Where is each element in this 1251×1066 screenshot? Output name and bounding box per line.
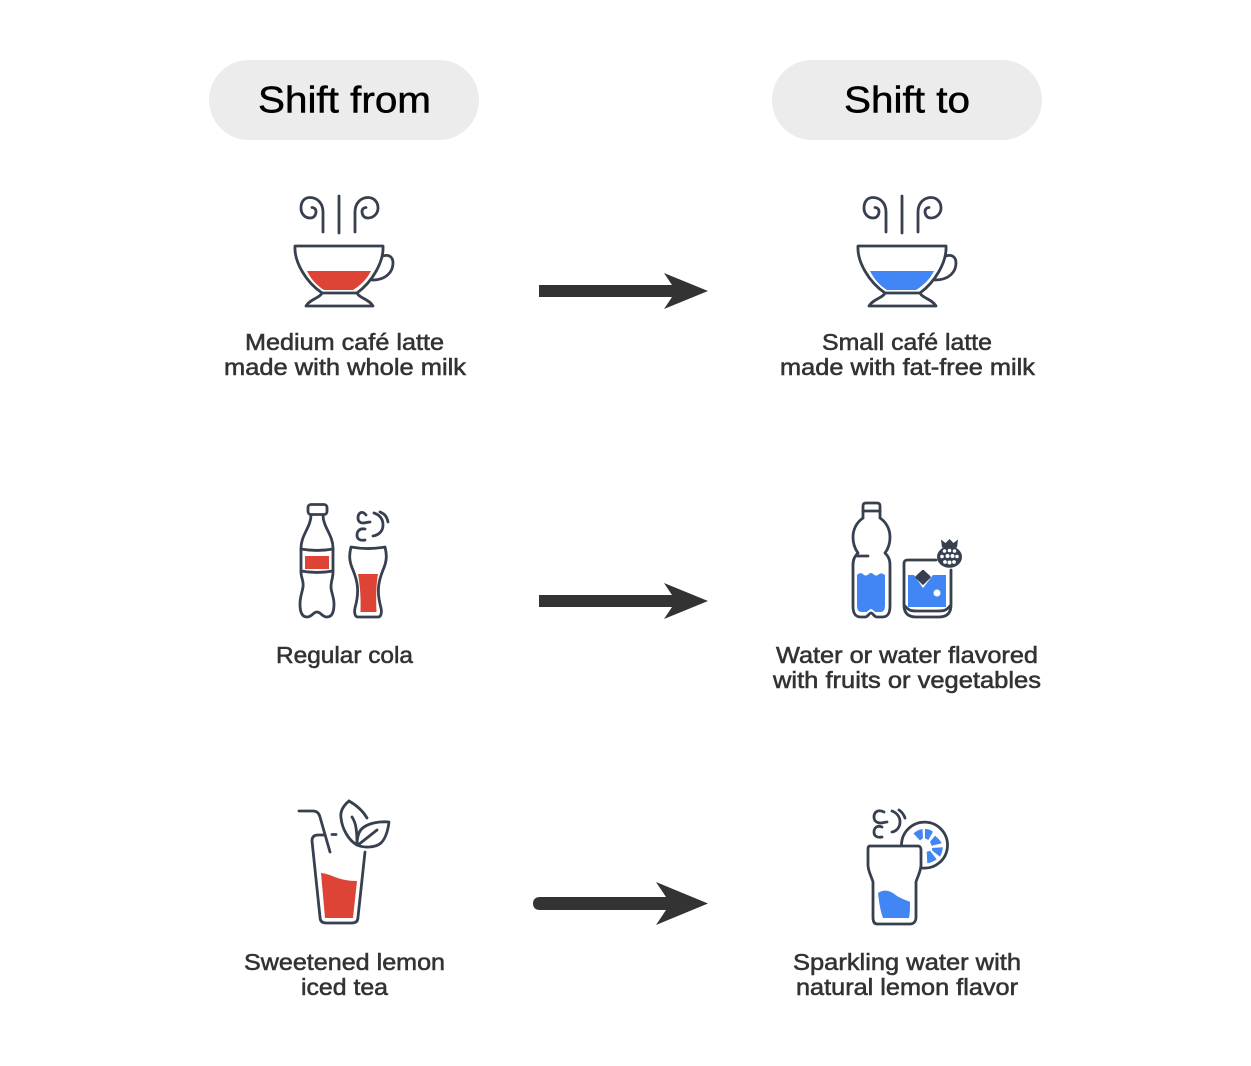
icon: cola bottle and glass <box>300 504 388 617</box>
icon: raspberry <box>937 539 962 568</box>
label: water or flavored water: Water or water flavored <box>776 642 1038 668</box>
heading pill: Shift to: Shift to <box>844 80 970 120</box>
icon: water bottle and glass with raspberry <box>853 503 962 617</box>
label: sparkling water with lemon flavor <box>793 949 1021 1000</box>
label: small cafe latte: Small café latte <box>822 329 992 355</box>
icon: iced tea glass with straw and leaves <box>299 801 389 923</box>
heading pill: Shift from <box>209 60 479 140</box>
label: sweetened lemon iced tea <box>244 949 445 1000</box>
arrow: row 2 <box>539 583 708 619</box>
label: small cafe latte <box>780 329 1036 380</box>
icon: latte cup with red fill <box>295 196 393 306</box>
label: water or flavored water <box>772 642 1041 693</box>
label: water or flavored water: with fruits or vegetables <box>772 667 1041 693</box>
label: regular cola: Regular cola <box>276 642 413 668</box>
icon: sparkling water glass with lemon slice <box>868 810 947 924</box>
heading pill: Shift to <box>772 60 1042 140</box>
label: medium cafe latte: made with whole milk <box>224 354 467 380</box>
label: small cafe latte: made with fat-free milk <box>780 354 1036 380</box>
icon: latte cup with blue fill <box>858 196 956 306</box>
arrow: row 1 <box>539 273 708 309</box>
label: sweetened lemon iced tea: Sweetened lemon <box>244 949 445 975</box>
arrow: row 3 <box>533 882 708 925</box>
label: sparkling water with lemon flavor: natural lemon flavor <box>796 974 1018 1000</box>
label: sparkling water with lemon flavor: Sparkling water with <box>793 949 1021 975</box>
label: medium cafe latte: Medium café latte <box>245 329 444 355</box>
heading pill: Shift from: Shift from <box>258 80 431 120</box>
label: medium cafe latte <box>224 329 467 380</box>
label: sweetened lemon iced tea: iced tea <box>301 974 388 1000</box>
